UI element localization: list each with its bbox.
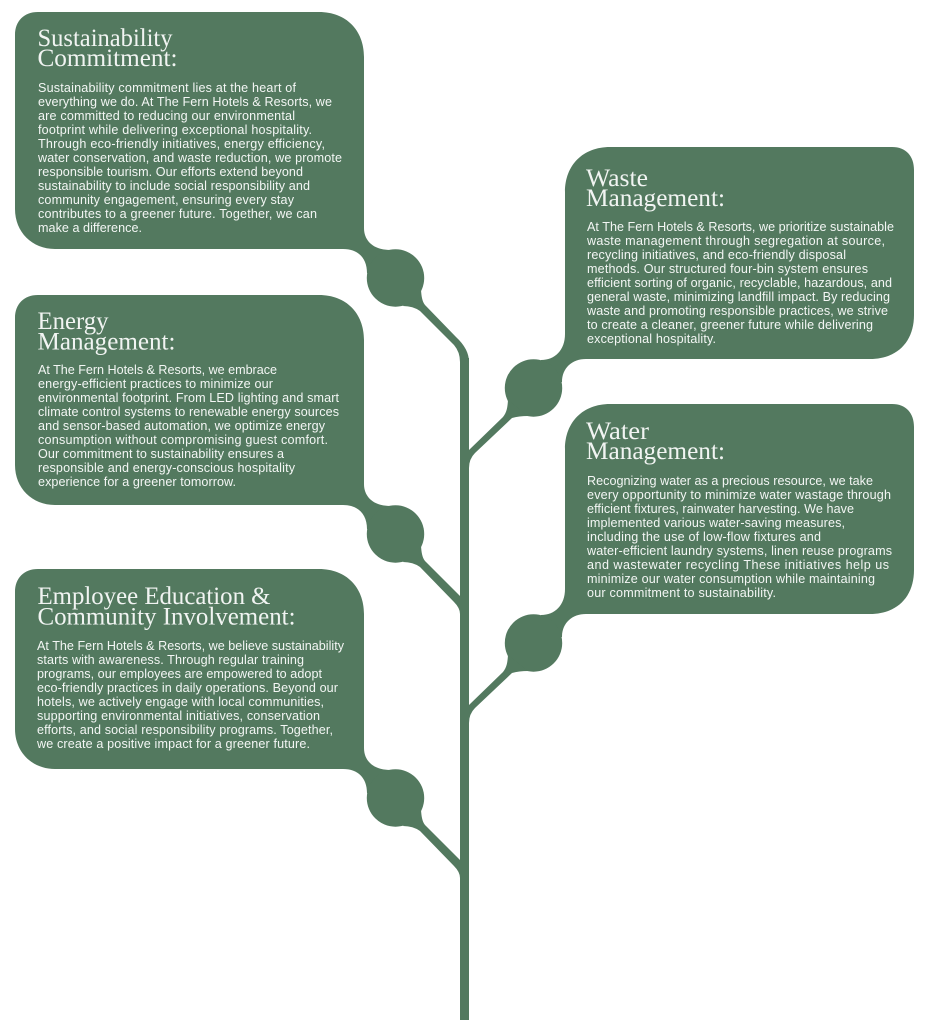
body text: water-efficient laundry systems, linen reuse programs — [586, 544, 892, 558]
heading: Management: — [586, 436, 725, 465]
panel: waste management — [469, 147, 914, 468]
body text: environmental footprint. From LED lighting and smart — [38, 391, 340, 405]
body text: At The Fern Hotels & Resorts, we embrace — [38, 363, 277, 377]
body text: waste management through segregation at source, — [586, 234, 885, 248]
body text: supporting environmental initiatives, conservation — [37, 709, 320, 723]
body text: minimize our water consumption while maintaining — [587, 572, 875, 586]
heading: Management: — [586, 183, 725, 212]
branch — [469, 400, 528, 468]
body text: implemented various water-saving measures, — [587, 516, 845, 530]
body text: water conservation, and waste reduction, we promote — [37, 151, 342, 165]
tree trunk — [460, 358, 469, 1020]
heading — [586, 416, 725, 465]
body text: sustainability to include social responsibility and — [38, 179, 310, 193]
body text: At The Fern Hotels & Resorts, we believe sustainability — [37, 639, 345, 653]
body text: recycling initiatives, and eco-friendly disposal — [587, 248, 846, 262]
body text: At The Fern Hotels & Resorts, we prioritize sustainable — [587, 220, 894, 234]
body text — [586, 474, 892, 600]
body text: efficient fixtures, rainwater harvesting. We have — [587, 502, 854, 516]
panel: water management — [469, 404, 914, 723]
heading: Employee Education & — [38, 581, 271, 610]
panel: sustainability commitment — [15, 12, 469, 362]
branch — [403, 546, 460, 614]
body text — [37, 81, 342, 235]
branch — [469, 655, 528, 723]
body text: energy-efficient practices to minimize our — [38, 377, 273, 391]
body text — [38, 363, 340, 489]
node circle — [367, 249, 424, 307]
heading: Management: — [38, 326, 176, 356]
body text: our commitment to sustainability. — [587, 586, 776, 600]
heading: Commitment: — [38, 43, 178, 72]
node circle — [505, 359, 562, 417]
body text: footprint while delivering exceptional hospitality. — [38, 123, 312, 137]
body text: to create a cleaner, greener future while delivering — [587, 318, 873, 332]
body text — [36, 639, 345, 751]
body text: everything we do. At The Fern Hotels & Resorts, we — [38, 95, 332, 109]
body text: are committed to reducing our environmental — [38, 109, 295, 123]
body text: starts with awareness. Through regular training — [37, 653, 304, 667]
body text: make a difference. — [38, 221, 142, 235]
heading: Sustainability — [38, 23, 173, 52]
body text — [586, 220, 894, 346]
heading: Community Involvement: — [38, 602, 296, 630]
body text: Our commitment to sustainability ensures a — [38, 447, 284, 461]
heading: Waste — [586, 163, 648, 192]
panel shape — [15, 295, 396, 534]
panel shape — [15, 12, 396, 278]
body text: responsible tourism. Our efforts extend beyond — [38, 165, 303, 179]
heading — [586, 163, 725, 212]
panel shape — [533, 404, 914, 643]
branch — [403, 290, 469, 362]
heading — [38, 581, 296, 630]
body text: climate control systems to renewable energy sources — [38, 405, 339, 419]
body text: methods. Our structured four-bin system ensures — [587, 262, 868, 276]
body text: and wastewater recycling These initiatives help us — [587, 558, 889, 572]
body text: including the use of low-flow fixtures and — [587, 530, 821, 544]
body text: Sustainability commitment lies at the heart of — [38, 81, 296, 95]
body text: hotels, we actively engage with local communities, — [37, 695, 324, 709]
heading: Water — [586, 416, 650, 445]
body text: Through eco-friendly initiatives, energy efficiency, — [38, 137, 325, 151]
body text: general waste, minimizing landfill impact. By reducing — [587, 290, 890, 304]
panel shape — [15, 569, 396, 798]
heading: Energy — [38, 306, 109, 335]
node circle — [505, 614, 562, 672]
body text: every opportunity to minimize water wastage through — [587, 488, 891, 502]
body text: contributes to a greener future. Together, we can — [38, 207, 317, 221]
body text: we create a positive impact for a greener future. — [36, 737, 310, 751]
branch — [403, 810, 460, 878]
body text: efficient sorting of organic, recyclable, hazardous, and — [587, 276, 892, 290]
body text: Recognizing water as a precious resource, we take — [587, 474, 873, 488]
heading — [38, 306, 176, 356]
body text: eco-friendly practices in daily operations. Beyond our — [37, 681, 338, 695]
body text: and sensor-based automation, we optimize energy — [38, 419, 326, 433]
heading — [38, 23, 178, 72]
body text: efforts, and social responsibility programs. Together, — [37, 723, 333, 737]
body text: community engagement, ensuring every stay — [38, 193, 295, 207]
body text: experience for a greener tomorrow. — [38, 475, 236, 489]
body text: consumption without compromising guest comfort. — [38, 433, 328, 447]
panel: employee education and community involvement — [15, 569, 460, 878]
body text: waste and promoting responsible practices, we strive — [586, 304, 888, 318]
body text: exceptional hospitality. — [587, 332, 716, 346]
node circle — [367, 769, 424, 827]
body text: programs, our employees are empowered to adopt — [37, 667, 322, 681]
panel shape — [533, 147, 914, 388]
node circle — [367, 505, 424, 563]
body text: responsible and energy-conscious hospitality — [38, 461, 296, 475]
panel: energy management — [15, 295, 460, 614]
